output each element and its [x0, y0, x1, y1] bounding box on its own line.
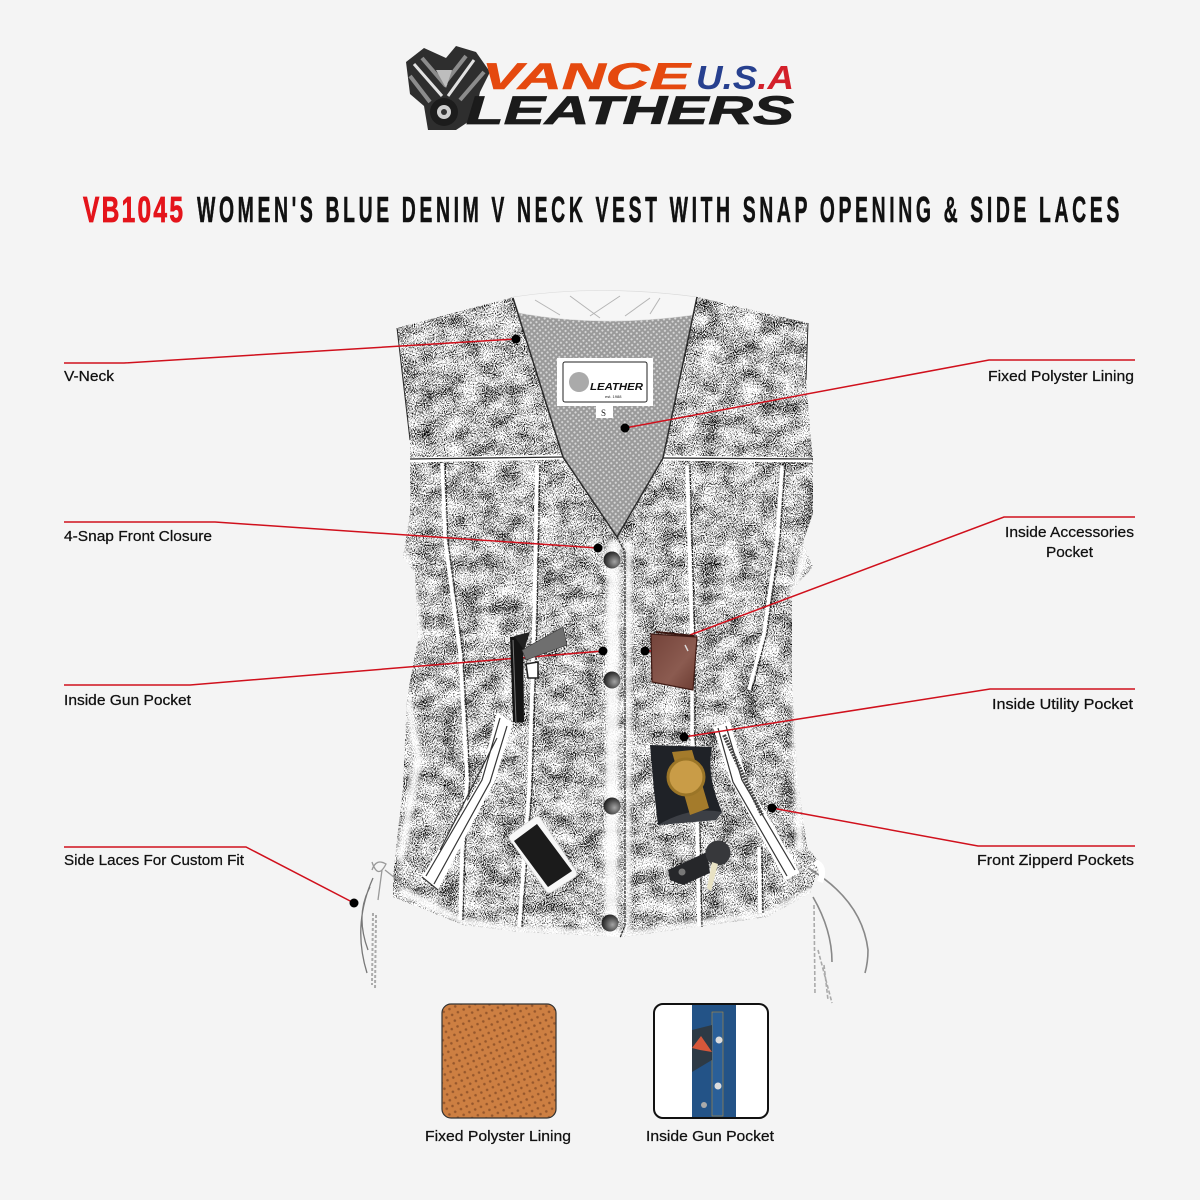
- neck label: [557, 358, 653, 418]
- callout dots: [350, 334, 776, 908]
- label: V-Neck: V-Neck: [64, 368, 115, 385]
- icon: pistol: [510, 627, 567, 722]
- neck label: est. 1988: [605, 394, 622, 399]
- neck label: LEATHER: [590, 382, 644, 393]
- snap buttons: [602, 552, 620, 932]
- icon: smartphone: [509, 816, 577, 893]
- icon: wallet: [651, 632, 697, 690]
- label: Inside Accessories Pocket: Inside Accessories: [1005, 524, 1134, 541]
- icon: v-twin engine: [406, 46, 490, 130]
- wordmark: VANCE: VANCE: [482, 56, 692, 97]
- logo: Vance Leathers USA: [406, 46, 794, 133]
- swatch caption: gun pocket: Inside Gun Pocket: [646, 1128, 775, 1145]
- icon: pouch with gold watch: [650, 745, 722, 825]
- label: Side Laces For Custom Fit: Side Laces For Custom Fit: [64, 852, 245, 869]
- title text: WOMEN'S BLUE DENIM V NECK VEST WITH SNAP OPENING & SIDE LACES: [197, 191, 1119, 231]
- title code: VB1045: [83, 189, 183, 230]
- label: Front Zipperd Pockets: Front Zipperd Pockets: [977, 852, 1134, 869]
- zipper pockets: [422, 712, 800, 890]
- vest illustration: [361, 285, 868, 1003]
- wordmark: LEATHERS: LEATHERS: [466, 89, 794, 133]
- title: [83, 189, 1119, 231]
- right zipper: [713, 722, 800, 880]
- label: Inside Accessories Pocket: [1005, 524, 1134, 561]
- label: 4-Snap Front Closure: 4-Snap Front Closure: [64, 528, 212, 545]
- label: Fixed Polyster Lining: Fixed Polyster Lining: [988, 368, 1134, 385]
- left zipper: [422, 712, 513, 890]
- denim body: [390, 285, 825, 945]
- label: Inside Gun Pocket: Inside Gun Pocket: [64, 692, 192, 709]
- watch bracelet: [672, 750, 709, 815]
- seams: [397, 297, 812, 938]
- neck label: S: [601, 408, 606, 418]
- swatch: inside gun pocket: [646, 1004, 775, 1145]
- label: Inside Accessories Pocket: Pocket: [1046, 544, 1094, 561]
- icon: car keys: [668, 840, 730, 891]
- callout lines: [64, 339, 1135, 903]
- swatch: polyester lining: [425, 1004, 571, 1145]
- label: Inside Utility Pocket: Inside Utility Pocket: [992, 696, 1134, 713]
- inner neck lining: [513, 290, 697, 537]
- swatch caption: lining: Fixed Polyster Lining: [425, 1128, 571, 1145]
- wordmark: U.S.A: U.S.A: [696, 59, 794, 96]
- side laces: [361, 862, 868, 1003]
- watch face: [668, 759, 704, 795]
